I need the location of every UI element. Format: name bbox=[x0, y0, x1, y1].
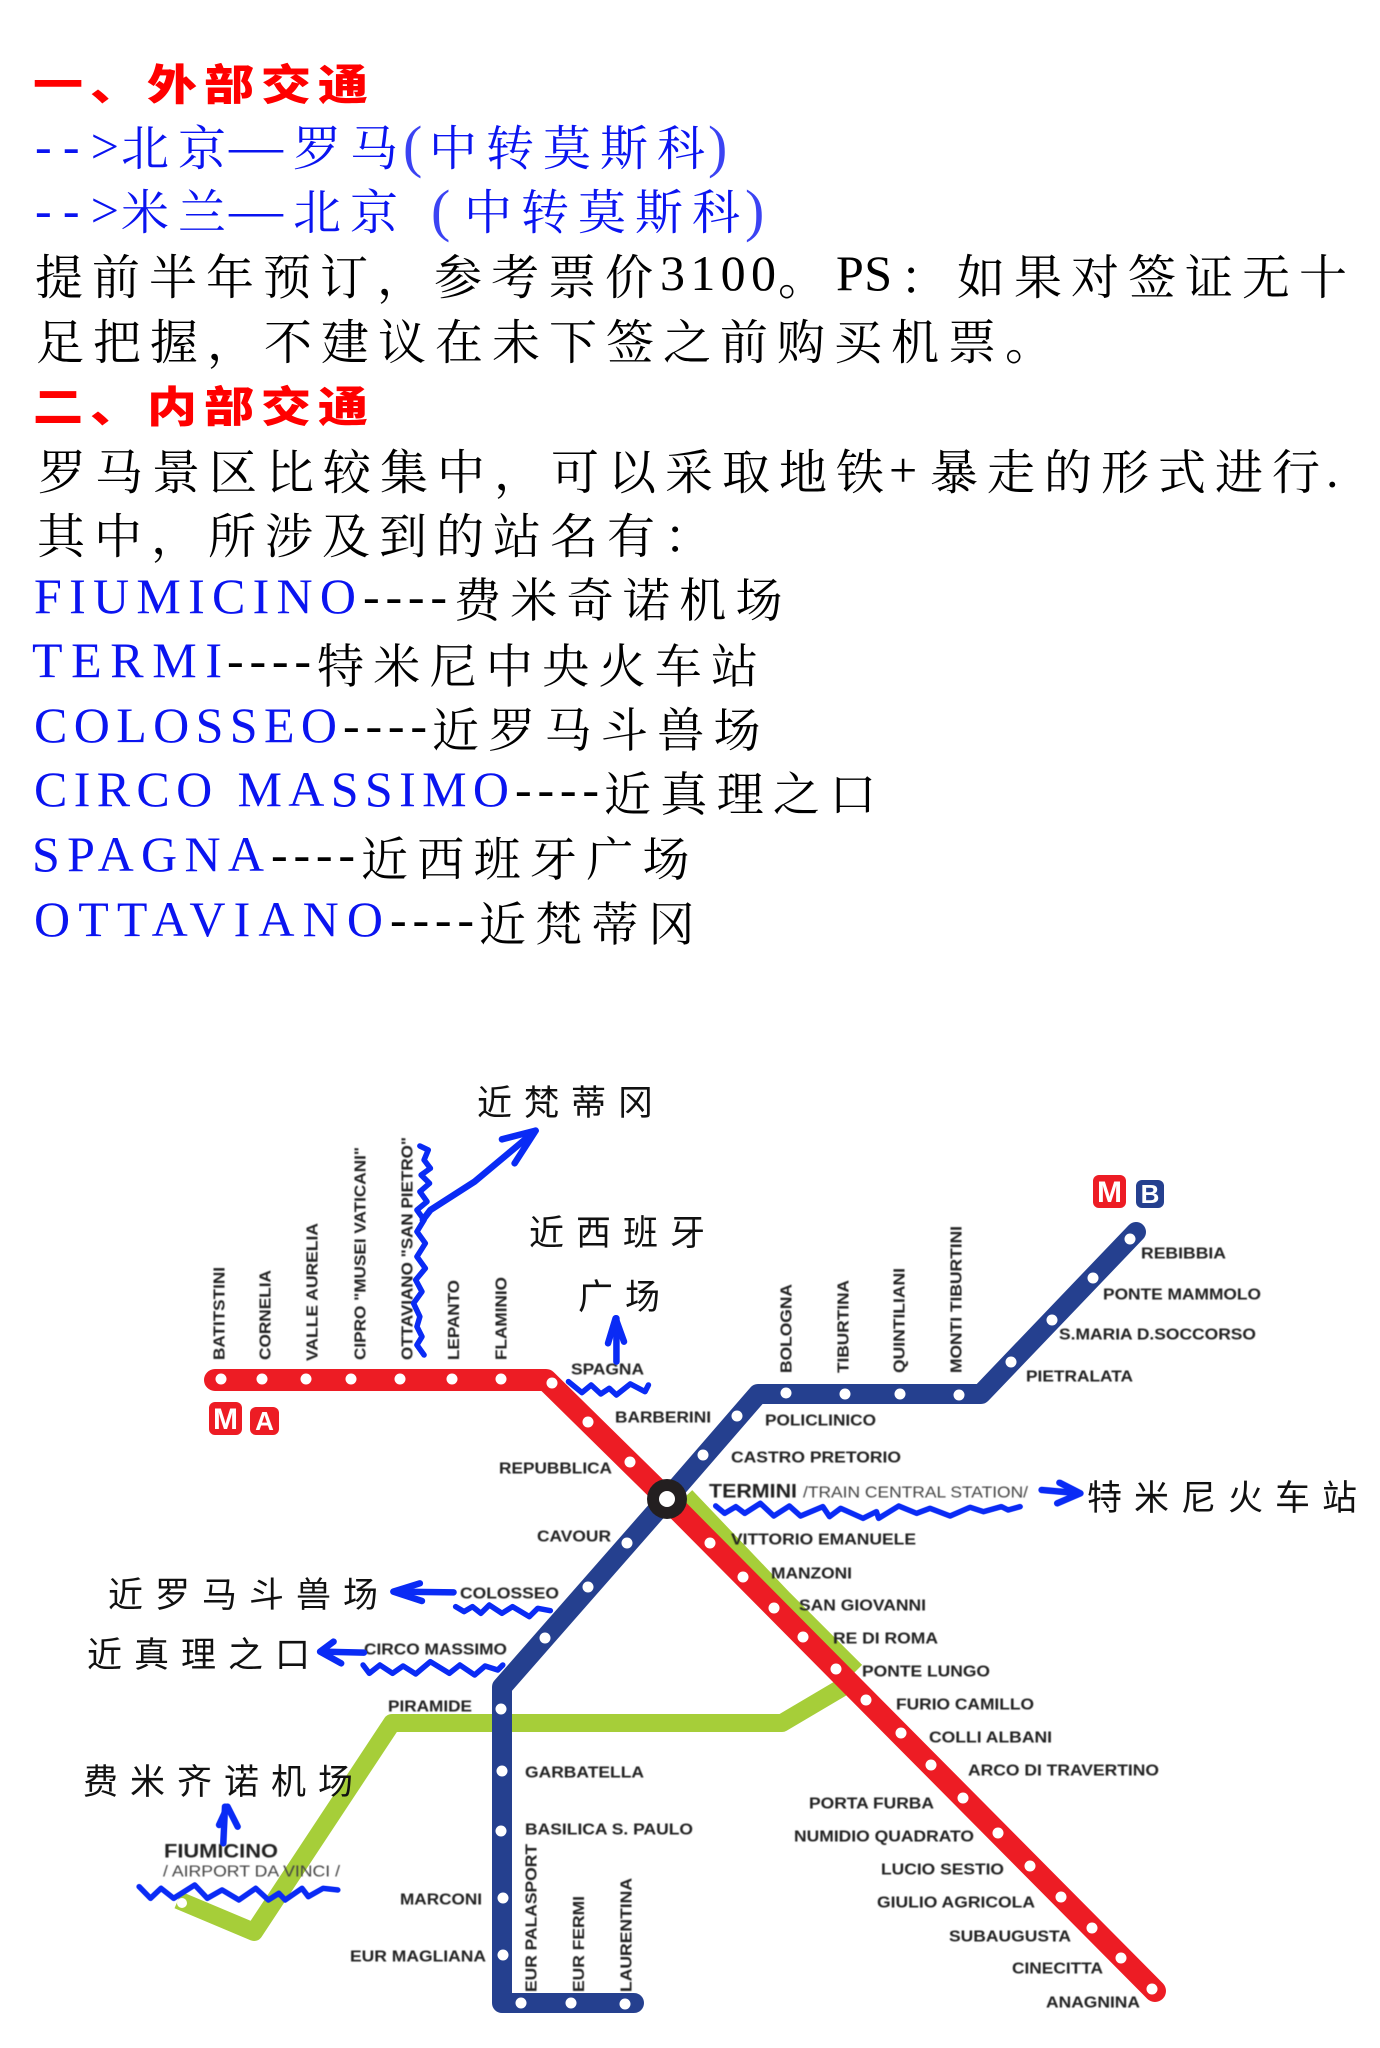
paragraph: booking advice: ：如果对签证无十 bbox=[900, 239, 1356, 308]
station labels: CINECITTA bbox=[1012, 1960, 1103, 1978]
station labels: BATITSTINI bbox=[212, 1267, 228, 1360]
heading: external transport: 一、外部交通 bbox=[33, 51, 375, 113]
route: Beijing to Rome: 中转莫斯科 bbox=[429, 110, 714, 179]
station labels: ARCO DI TRAVERTINO bbox=[968, 1762, 1159, 1780]
station labels: REBIBBIA bbox=[1141, 1246, 1226, 1262]
route: Milan to Beijing: 中转莫斯科 bbox=[464, 174, 749, 243]
station labels: PONTE LUNGO bbox=[862, 1664, 990, 1680]
station list: CIRCO MASSIMO bbox=[34, 761, 509, 817]
station labels: PONTE MAMMOLO bbox=[1103, 1286, 1261, 1304]
heading: internal transport: 二、内部交通 bbox=[33, 373, 375, 435]
badge: M B: M bbox=[1097, 1176, 1122, 1209]
handwritten note: Termini station: 特米尼火车站 bbox=[1087, 1470, 1369, 1521]
annotation: Ottaviano underline and arrow bbox=[414, 1131, 536, 1355]
handwritten note: near Spanish Steps: 近西班牙 bbox=[529, 1205, 717, 1256]
station labels: POLICLINICO bbox=[765, 1412, 876, 1430]
handwritten note: near Bocca della Verita: 近真理之口 bbox=[87, 1627, 322, 1678]
station list: SPAGNA bbox=[32, 826, 264, 882]
station labels: RE DI ROMA bbox=[833, 1630, 938, 1648]
station labels: PORTA FURBA bbox=[809, 1796, 934, 1812]
line A: red bbox=[215, 1380, 1155, 1991]
line B: blue bbox=[502, 1232, 1136, 2003]
annotation: Colosseo underline and arrow bbox=[393, 1583, 550, 1617]
route: Milan to Beijing: --> bbox=[35, 182, 119, 238]
route: Beijing to Rome: 罗马 bbox=[293, 110, 407, 179]
interchange hub: Termini bbox=[647, 1479, 687, 1519]
badge: M B bbox=[1093, 1175, 1164, 1209]
station labels: SAN GIOVANNI bbox=[799, 1598, 926, 1614]
station labels: COLLI ALBANI bbox=[929, 1730, 1052, 1746]
station list: 近罗马斗兽场 bbox=[432, 694, 770, 761]
annotation: Termini underline and arrow bbox=[716, 1483, 1080, 1518]
station list: ---- bbox=[515, 761, 599, 817]
route: Milan to Beijing: 北京 bbox=[293, 174, 407, 243]
annotation: Circo Massimo underline and arrow bbox=[320, 1642, 503, 1675]
station list: 特米尼中央火车站 bbox=[317, 630, 767, 697]
station labels: FLAMINIO bbox=[494, 1277, 510, 1360]
station labels: SPAGNA bbox=[571, 1362, 644, 1378]
station labels: LAURENTINA bbox=[618, 1878, 636, 1992]
badge: M A: M bbox=[213, 1403, 238, 1436]
station list: 费米奇诺机场 bbox=[454, 564, 792, 631]
metro map bbox=[83, 1075, 1369, 2012]
badge: M B: B bbox=[1141, 1179, 1159, 1209]
station labels: ANAGNINA bbox=[1046, 1994, 1140, 2012]
paragraph: booking advice: PS bbox=[836, 245, 892, 301]
station list bbox=[32, 564, 886, 955]
route: Milan to Beijing: ) bbox=[745, 178, 764, 243]
station labels bbox=[163, 1137, 1261, 2012]
route: Milan to Beijing bbox=[35, 174, 764, 243]
route: Beijing to Rome bbox=[35, 110, 727, 179]
station list: ---- bbox=[363, 568, 447, 624]
station labels: BARBERINI bbox=[615, 1410, 711, 1426]
station labels: GIULIO AGRICOLA bbox=[877, 1894, 1035, 1912]
badge: M A: A bbox=[255, 1406, 274, 1436]
station labels: REPUBBLICA bbox=[499, 1460, 612, 1478]
paragraph: booking advice: 足把握，不建议在未下签之前购买机票。 bbox=[36, 304, 1062, 373]
station labels: LUCIO SESTIO bbox=[881, 1862, 1004, 1878]
station list: 近梵蒂冈 bbox=[479, 888, 704, 955]
station labels: NUMIDIO QUADRATO bbox=[794, 1828, 974, 1846]
station labels: CORNELIA bbox=[258, 1270, 274, 1360]
paragraph: sightseeing: 罗马景区比较集中，可以采取地铁 bbox=[38, 434, 893, 503]
paragraph: sightseeing: + bbox=[889, 442, 917, 498]
station list: FIUMICINO bbox=[34, 568, 356, 624]
station labels: CIRCO MASSIMO bbox=[364, 1642, 507, 1658]
station labels: PIETRALATA bbox=[1026, 1368, 1133, 1386]
stations: line B bbox=[496, 1234, 1136, 2010]
paragraph: sightseeing bbox=[37, 434, 1338, 567]
station labels: BOLOGNA bbox=[778, 1284, 796, 1373]
station labels: FURIO CAMILLO bbox=[896, 1696, 1034, 1714]
station list: 近真理之口 bbox=[604, 758, 886, 825]
station list: ---- bbox=[390, 891, 474, 947]
station labels: VITTORIO EMANUELE bbox=[731, 1532, 916, 1548]
route: Beijing to Rome: 北京 bbox=[121, 110, 235, 179]
route: Beijing to Rome: ) bbox=[708, 114, 727, 179]
station list: OTTAVIANO bbox=[34, 891, 383, 947]
station list: COLOSSEO bbox=[34, 697, 337, 753]
station labels: EUR FERMI bbox=[571, 1896, 588, 1992]
annotation: Fiumicino underline and arrow bbox=[139, 1807, 338, 1900]
station labels: / AIRPORT DA VINCI / bbox=[163, 1864, 341, 1880]
paragraph: sightseeing: . bbox=[1326, 442, 1338, 498]
station list: 近西班牙广场 bbox=[361, 823, 699, 890]
route: Beijing to Rome: — bbox=[228, 118, 284, 174]
handwritten note: near Vatican: 近梵蒂冈 bbox=[477, 1075, 665, 1126]
station list: ---- bbox=[227, 632, 311, 688]
paragraph: booking advice bbox=[35, 239, 1356, 373]
station labels: CIPRO "MUSEI VATICANI" bbox=[352, 1147, 370, 1360]
station list: TERMI bbox=[32, 632, 222, 688]
paragraph: sightseeing: 暴走的形式进行 bbox=[930, 434, 1329, 503]
route: Milan to Beijing: ( bbox=[431, 178, 450, 243]
annotation: Spagna underline and arrow bbox=[568, 1318, 648, 1395]
station labels: CASTRO PRETORIO bbox=[731, 1450, 901, 1466]
station labels: GARBATELLA bbox=[525, 1764, 644, 1782]
handwritten note: near Colosseum: 近罗马斗兽场 bbox=[108, 1567, 390, 1618]
stations: line A bbox=[216, 1374, 1158, 1994]
station labels: S.MARIA D.SOCCORSO bbox=[1059, 1326, 1256, 1344]
route: Beijing to Rome: --> bbox=[35, 118, 119, 174]
paragraph: booking advice: 提前半年预订，参考票价 bbox=[35, 239, 662, 308]
station list: ---- bbox=[271, 826, 355, 882]
station labels: /TRAIN CENTRAL STATION/ bbox=[803, 1484, 1029, 1502]
station labels: EUR MAGLIANA bbox=[350, 1948, 486, 1966]
station labels: COLOSSEO bbox=[460, 1586, 559, 1602]
route: Milan to Beijing: — bbox=[228, 182, 284, 238]
station labels: MARCONI bbox=[400, 1892, 482, 1908]
handwritten note: Fiumicino airport: 费米齐诺机场 bbox=[83, 1754, 365, 1805]
station labels: TIBURTINA bbox=[836, 1280, 852, 1373]
handwritten note: near Spanish Steps bbox=[529, 1205, 717, 1320]
station labels: EUR PALASPORT bbox=[524, 1844, 540, 1992]
station labels: QUINTILIANI bbox=[892, 1268, 908, 1373]
station labels: PIRAMIDE bbox=[388, 1698, 472, 1716]
paragraph: sightseeing: 其中，所涉及到的站名有： bbox=[37, 498, 721, 567]
handwritten note: near Spanish Steps: 广场 bbox=[578, 1269, 672, 1320]
station labels: VALLE AURELIA bbox=[304, 1223, 322, 1361]
station labels: CAVOUR bbox=[537, 1528, 611, 1546]
panel: transport text bbox=[32, 51, 1356, 955]
badge: M A bbox=[209, 1402, 279, 1436]
station labels: BASILICA S. PAULO bbox=[525, 1822, 693, 1838]
station labels: MANZONI bbox=[771, 1566, 852, 1582]
route: Milan to Beijing: 米兰 bbox=[121, 174, 235, 243]
line C: green bbox=[177, 1497, 855, 1932]
station labels: TERMINI bbox=[709, 1482, 797, 1502]
station labels: LEPANTO bbox=[446, 1280, 463, 1360]
station labels: OTTAVIANO "SAN PIETRO" bbox=[400, 1137, 416, 1360]
station labels: FIUMICINO bbox=[164, 1842, 278, 1862]
route: Beijing to Rome: ( bbox=[403, 114, 422, 179]
station labels: SUBAUGUSTA bbox=[949, 1928, 1071, 1946]
paragraph: booking advice: 3100 bbox=[660, 245, 776, 301]
station labels: MONTI TIBURTINI bbox=[948, 1226, 966, 1373]
station list: ---- bbox=[343, 697, 427, 753]
paragraph: booking advice: 。 bbox=[778, 239, 835, 308]
